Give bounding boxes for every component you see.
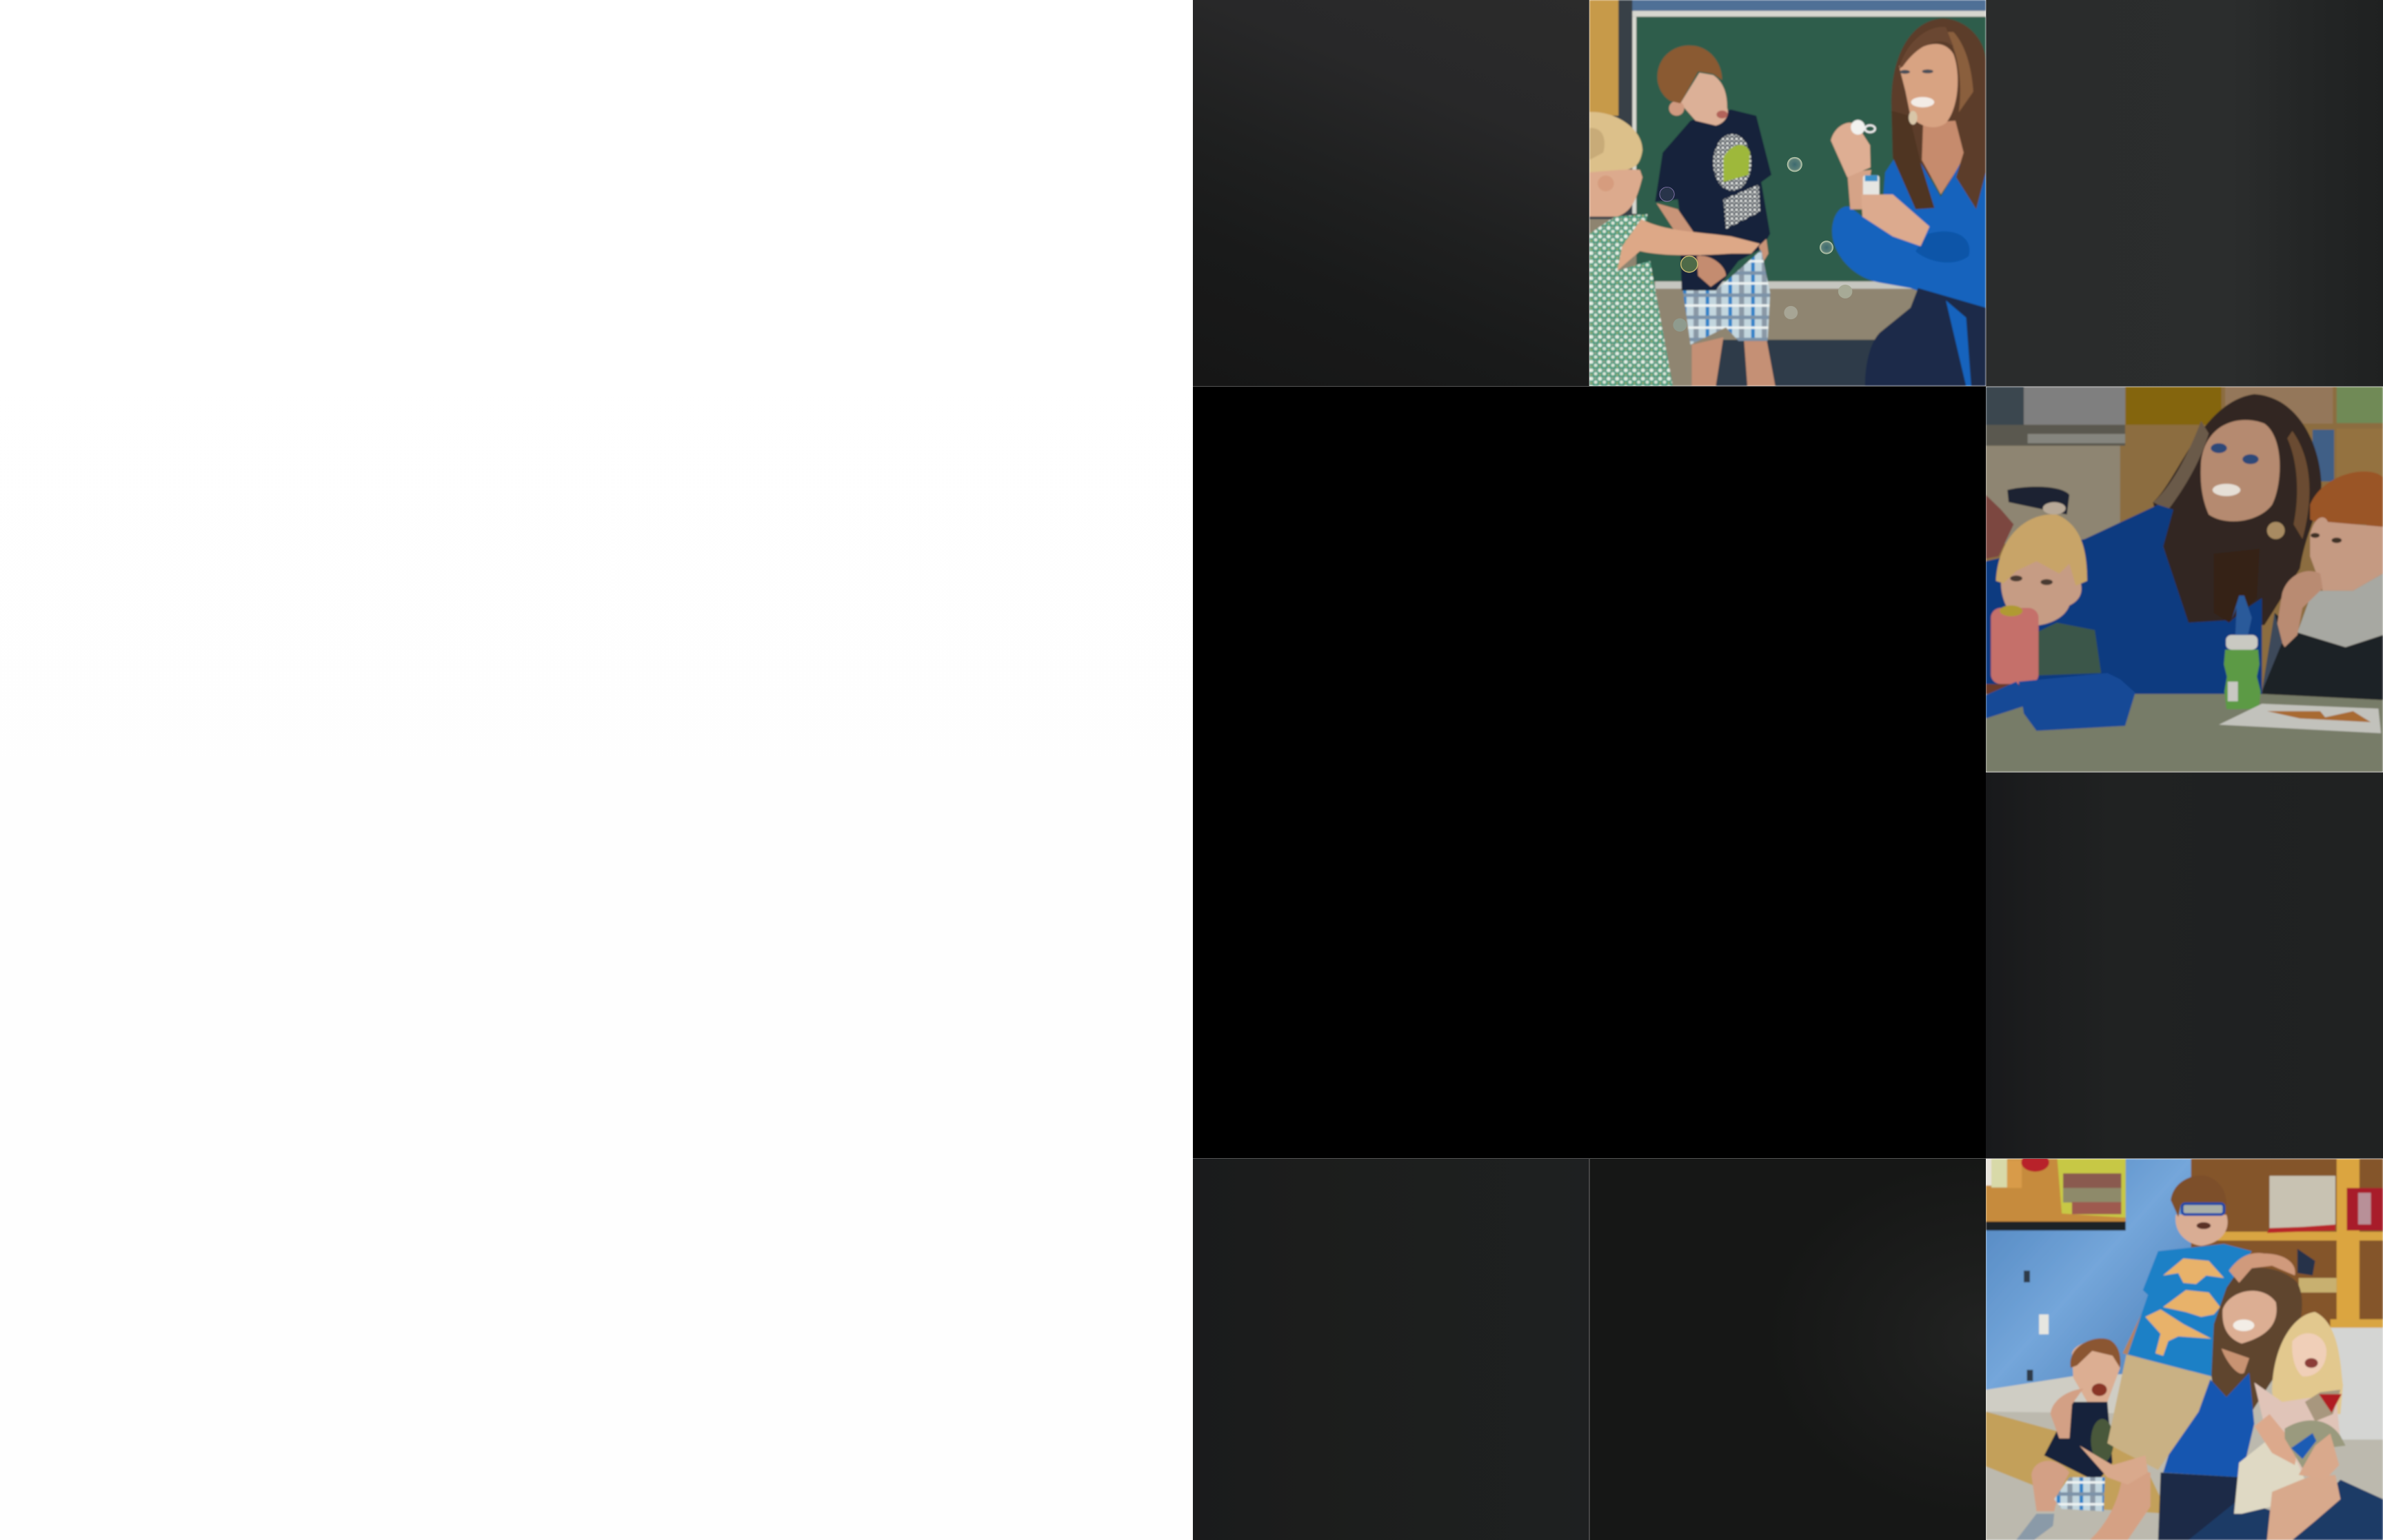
panel: dark tile bottom left — [1193, 1158, 1589, 1540]
panel: black centre square — [1193, 386, 1986, 1158]
panel: dark tile below teacher at table — [1986, 772, 2383, 1158]
photo: teacher at table with two children eating snacks — [1986, 386, 2383, 772]
photo: teacher blowing bubbles with two children at a chalkboard — [1589, 0, 1986, 386]
photo: teacher laughing on the floor with three children — [1986, 1158, 2383, 1540]
panel: dark tile bottom middle — [1589, 1158, 1986, 1540]
panel: dark tile top right — [1986, 0, 2383, 386]
panel: white left column — [0, 0, 1193, 1540]
panel: dark tile top left — [1193, 0, 1589, 386]
